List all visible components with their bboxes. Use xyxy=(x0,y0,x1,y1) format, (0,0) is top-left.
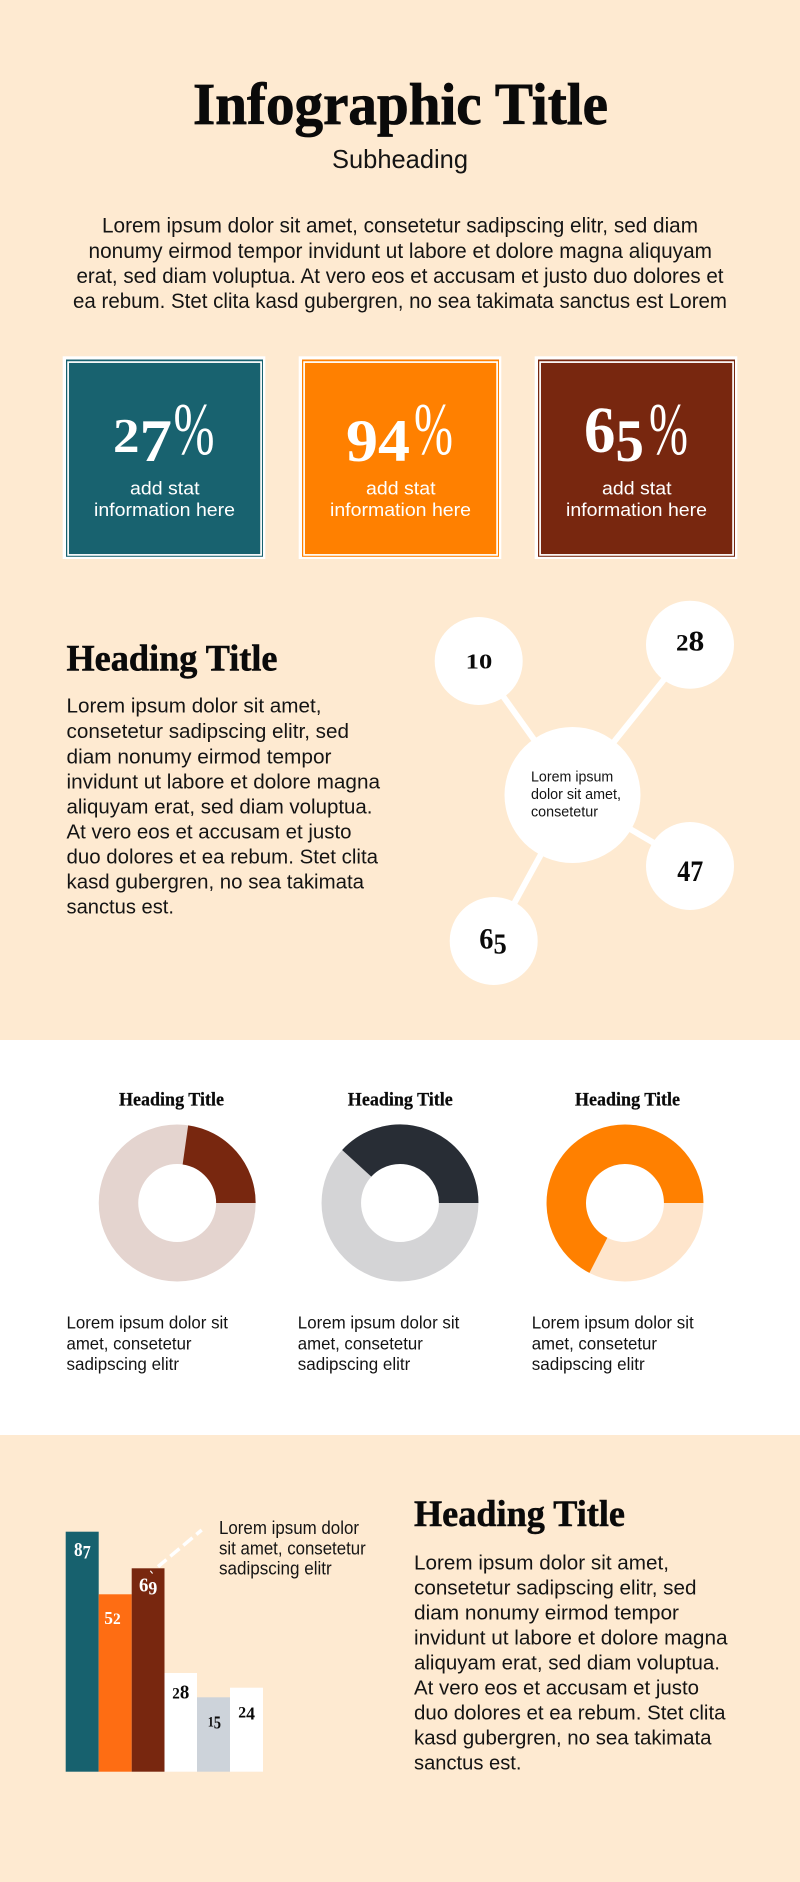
central node: Lorem ipsum xyxy=(531,770,613,786)
node: 28 xyxy=(646,601,734,689)
callout text: sadipscing elitr xyxy=(219,1559,332,1579)
stat label: information here xyxy=(94,499,235,520)
node: 47: 47 xyxy=(677,855,703,888)
callout text: Lorem ipsum dolor xyxy=(219,1518,359,1538)
body text: At vero eos et accusam et justo xyxy=(414,1677,699,1699)
stat label xyxy=(330,478,471,520)
panel: bottom heading and body text xyxy=(414,1493,728,1774)
stat label: add stat xyxy=(602,478,672,498)
body text: diam nonumy eirmod tempor xyxy=(414,1602,679,1624)
donut column 3 xyxy=(532,1091,694,1374)
percent sign: % xyxy=(414,389,453,471)
caption xyxy=(298,1313,459,1374)
bar: 69 xyxy=(132,1568,164,1772)
stat label: information here xyxy=(566,499,707,520)
stat label: information here xyxy=(330,499,471,520)
body text: duo dolores et ea rebum. Stet clita xyxy=(414,1702,726,1724)
body text: Lorem ipsum dolor sit amet, xyxy=(414,1552,669,1574)
node: 47 xyxy=(646,822,734,910)
caption: sadipscing elitr xyxy=(532,1354,645,1374)
stat card: 65% xyxy=(535,356,737,559)
caption: sadipscing elitr xyxy=(66,1354,179,1374)
intro paragraph: Lorem ipsum dolor sit amet, consetetur sadipscing elitr, sed diam xyxy=(102,214,698,238)
body text xyxy=(66,696,381,918)
stat value: 6 xyxy=(584,394,615,467)
node: 10 xyxy=(435,617,523,705)
subheading: Subheading xyxy=(332,144,468,174)
intro paragraph xyxy=(73,214,727,313)
percent sign: % xyxy=(649,389,688,471)
stat label: add stat xyxy=(366,478,436,498)
caption xyxy=(66,1313,228,1374)
donut column 2 xyxy=(298,1091,459,1374)
body text: invidunt ut labore et dolore magna xyxy=(414,1627,728,1649)
header xyxy=(73,71,727,313)
central node: dolor sit amet, xyxy=(531,787,621,803)
body text: sanctus est. xyxy=(66,896,174,918)
bar: 69: 6 xyxy=(139,1575,148,1597)
bar: 15: 5 xyxy=(214,1713,221,1733)
body text: duo dolores et ea rebum. Stet clita xyxy=(66,846,379,868)
node: 28: 28 xyxy=(676,626,704,658)
body text: aliquyam erat, sed diam voluptua. xyxy=(66,796,372,818)
bar: 24: 4 xyxy=(246,1703,255,1723)
donut column 1 xyxy=(66,1091,236,1374)
body text: At vero eos et accusam et justo xyxy=(66,821,351,843)
body text: kasd gubergren, no sea takimata xyxy=(414,1727,712,1749)
panel: donut charts xyxy=(0,1040,800,1435)
title: Infographic Title xyxy=(193,71,608,137)
heading: Heading Title xyxy=(414,1493,625,1534)
node: 65 xyxy=(450,897,538,985)
stat label xyxy=(94,478,235,520)
bar: 87 xyxy=(66,1532,99,1772)
panel: heading and body text xyxy=(66,638,381,918)
caption: Lorem ipsum dolor sit xyxy=(532,1313,694,1333)
stat label xyxy=(566,478,707,520)
intro paragraph: ea rebum. Stet clita kasd gubergren, no sea takimata sanctus est Lorem xyxy=(73,290,727,313)
stat value: 5 xyxy=(615,408,644,474)
donut chart xyxy=(566,1144,684,1262)
caption: amet, consetetur xyxy=(532,1333,657,1353)
stat card: 94% xyxy=(299,356,501,559)
central node: consetetur xyxy=(531,804,598,820)
hub and spoke diagram xyxy=(435,601,734,985)
caption: amet, consetetur xyxy=(66,1333,192,1353)
bar: 52 xyxy=(99,1594,132,1772)
bar: 24: 2 xyxy=(238,1704,246,1721)
donut heading: Heading Title xyxy=(575,1091,680,1111)
intro paragraph: erat, sed diam voluptua. At vero eos et accusam et justo duo dolores et xyxy=(76,265,724,288)
caption: Lorem ipsum dolor sit xyxy=(298,1313,459,1333)
bar: 24 xyxy=(230,1688,263,1772)
body text: kasd gubergren, no sea takimata xyxy=(66,871,365,893)
bar: 52: 52 xyxy=(104,1608,121,1628)
stat value: 2 xyxy=(113,408,140,463)
body text: diam nonumy eirmod tempor xyxy=(66,746,332,768)
connector lines xyxy=(495,672,670,911)
donut chart xyxy=(341,1144,459,1262)
intro paragraph: nonumy eirmod tempor invidunt ut labore et dolore magna aliquyam xyxy=(88,240,712,263)
node: 10: 10 xyxy=(466,649,492,673)
stat label: add stat xyxy=(130,478,200,498)
body text xyxy=(414,1552,728,1774)
callout leader line xyxy=(151,1530,202,1572)
stat card: 27% xyxy=(63,356,265,559)
bar: 87: 8 xyxy=(74,1539,83,1561)
body text: sanctus est. xyxy=(414,1752,522,1774)
heading: Heading Title xyxy=(66,638,278,678)
bar: 87: 7 xyxy=(83,1542,91,1564)
node: 65: 5 xyxy=(493,929,507,960)
stat value: 94 xyxy=(346,408,410,474)
bar: 15: 1 xyxy=(208,1715,214,1731)
caption: Lorem ipsum dolor sit xyxy=(66,1313,228,1333)
donut chart xyxy=(118,1144,236,1262)
bar: 28: 28 xyxy=(172,1681,189,1703)
body text: consetetur sadipscing elitr, sed xyxy=(66,721,349,743)
body text: Lorem ipsum dolor sit amet, xyxy=(66,696,322,718)
bar: 69: 9 xyxy=(148,1579,157,1600)
donut heading: Heading Title xyxy=(119,1091,224,1111)
body text: consetetur sadipscing elitr, sed xyxy=(414,1577,696,1599)
bar: 28 xyxy=(164,1673,197,1772)
stat value: 7 xyxy=(140,408,172,474)
node: 65: 6 xyxy=(479,922,493,955)
central node xyxy=(504,727,640,863)
body text: invidunt ut labore et dolore magna xyxy=(66,771,381,793)
bar chart xyxy=(66,1518,366,1772)
callout text: sit amet, consetetur xyxy=(219,1538,366,1558)
percent sign: % xyxy=(174,389,214,471)
body text: aliquyam erat, sed diam voluptua. xyxy=(414,1652,720,1674)
caption xyxy=(532,1313,694,1374)
callout text xyxy=(219,1518,366,1579)
bar: 15 xyxy=(197,1697,230,1772)
caption: amet, consetetur xyxy=(298,1333,423,1353)
caption: sadipscing elitr xyxy=(298,1354,410,1374)
donut heading: Heading Title xyxy=(348,1091,453,1111)
